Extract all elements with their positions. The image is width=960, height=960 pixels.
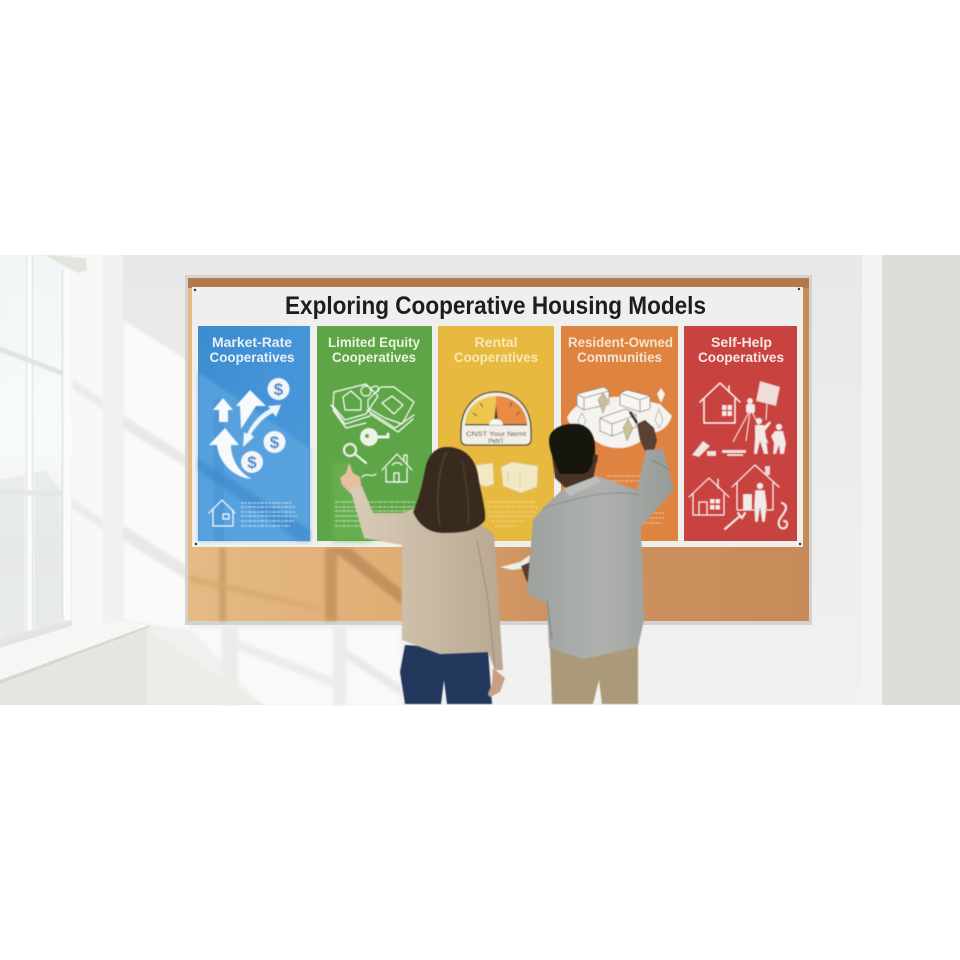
- poster sheet: [192, 287, 803, 547]
- heading: Communities: [577, 350, 662, 365]
- sunlight on left wall: [123, 320, 400, 705]
- text block: [487, 502, 538, 526]
- heading: [568, 335, 673, 365]
- heading: [698, 335, 784, 365]
- icon: rent gauge: [461, 392, 531, 445]
- hair: [413, 447, 485, 533]
- paper: [500, 555, 530, 570]
- title: Exploring Cooperative Housing Models: [285, 292, 706, 320]
- panel: market-rate cooperatives: [198, 326, 310, 541]
- panel: rental cooperatives: [438, 326, 554, 541]
- heading: Cooperatives: [332, 350, 416, 365]
- text block: [606, 476, 664, 523]
- head hair: [549, 424, 595, 474]
- icon: growth arrows and coins: $: [247, 453, 257, 472]
- icon: key top: [360, 428, 388, 446]
- shirt: [527, 449, 674, 659]
- icon: rent gauge: PeNT: [488, 439, 504, 445]
- heading: Self-Help: [711, 335, 772, 350]
- pins: [194, 288, 801, 545]
- icon: rental houses: [476, 462, 538, 493]
- heading: Limited Equity: [328, 335, 420, 350]
- heading: [328, 335, 420, 365]
- raised hand: [340, 463, 362, 494]
- icon: house: [382, 454, 412, 482]
- icon: volunteers with sign and ladder: [733, 381, 786, 454]
- icon: lower left house: [689, 478, 729, 515]
- sweater: [350, 486, 503, 670]
- icon: rent gauge: CNST Your Nemt: [466, 431, 526, 438]
- person: man seen from behind: [500, 412, 674, 704]
- heading: Cooperatives: [210, 350, 294, 365]
- icon: lower right house with builder: [732, 465, 779, 522]
- panel: resident-owned communities: [561, 326, 678, 541]
- heading: Cooperatives: [454, 350, 538, 365]
- bulletin board: [185, 275, 812, 625]
- icon: house upper: [700, 383, 740, 423]
- window pier: [72, 255, 123, 630]
- heading: Market-Rate: [212, 335, 293, 350]
- heading: [210, 335, 294, 365]
- jeans: [400, 645, 492, 704]
- raised hand: [637, 420, 657, 451]
- window sill and lower wall: [0, 622, 265, 705]
- background photo: sunlit room: [0, 255, 960, 705]
- icon: growth arrows and coins: $: [274, 380, 284, 399]
- board frame: [185, 275, 812, 625]
- right wall column: [862, 255, 960, 705]
- marker: [630, 412, 637, 423]
- icon: magnifier key: [344, 444, 366, 463]
- neck and face: [552, 455, 598, 490]
- icon: growth arrows and coins: $: [270, 433, 280, 452]
- heading: [454, 335, 538, 365]
- cork surface: [188, 278, 809, 621]
- icon: house: [209, 500, 235, 526]
- hand holding paper: [521, 562, 533, 582]
- heading: Resident-Owned: [568, 335, 673, 350]
- icon: community map with homes: [567, 387, 672, 448]
- icon: wrench and hook: [725, 503, 787, 529]
- icon: growth arrows and coins: [209, 378, 290, 479]
- icon: equity tags and keys: [331, 384, 414, 482]
- heading: Cooperatives: [698, 350, 784, 365]
- text block: [335, 502, 415, 526]
- ear: [592, 454, 598, 464]
- cork sunlight shadows: [190, 548, 402, 621]
- trousers: [550, 645, 638, 704]
- panel: limited equity cooperatives: [317, 326, 432, 541]
- icon: tools row: [692, 441, 746, 457]
- lowered hand: [488, 668, 505, 697]
- window with panes and view: [0, 255, 87, 648]
- person: woman seen from behind: [340, 447, 505, 704]
- heading: Rental: [474, 335, 518, 350]
- text block: [241, 503, 297, 526]
- panel: self-help cooperatives: [684, 326, 797, 541]
